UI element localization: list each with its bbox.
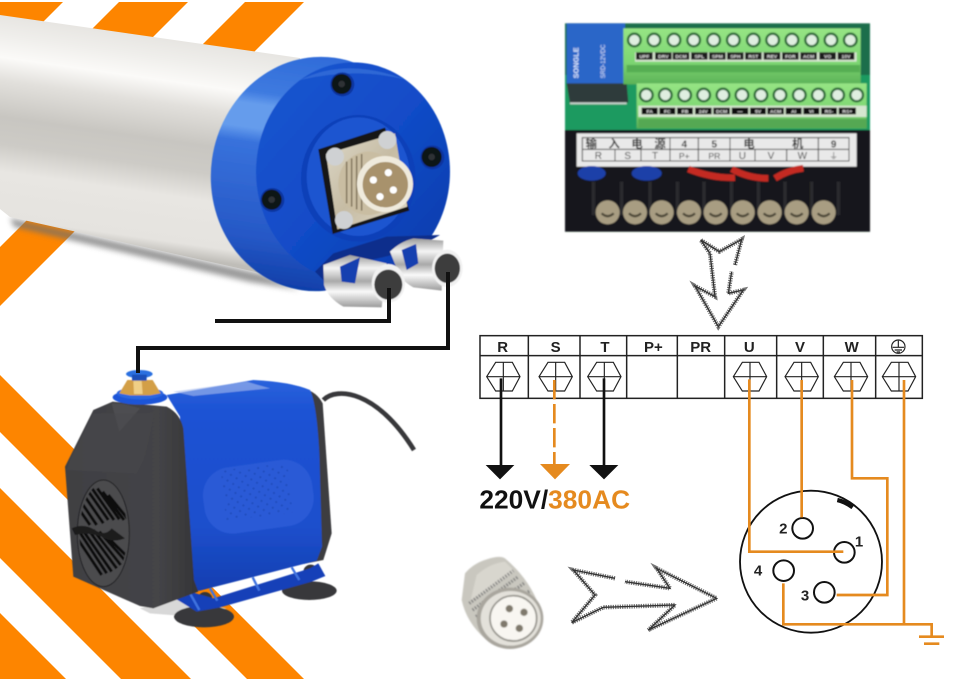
pin numbers: 1 — [855, 534, 863, 551]
relay text: SONGLE — [571, 47, 580, 78]
pump cable — [323, 394, 414, 450]
upper terminal labels: VO — [824, 54, 831, 60]
relay: SRD-12VDC — [601, 44, 607, 78]
rear gland — [390, 238, 463, 291]
connector pins — [370, 169, 397, 200]
label strip text: 9 — [831, 140, 837, 151]
sketch arrow right — [572, 568, 717, 630]
black terminal section — [565, 130, 870, 232]
terminal labels: U — [744, 339, 755, 356]
upper terminal labels: FOR — [785, 54, 796, 60]
upper terminal labels: UPF — [639, 54, 649, 60]
upper terminal labels: 10V — [842, 54, 851, 60]
wiring diagram — [479, 336, 944, 644]
sketch arrow down — [695, 239, 743, 327]
terminal label strip — [577, 133, 857, 167]
pin numbers: 3 — [801, 588, 809, 605]
voltage label: 220V/380AC — [479, 484, 630, 514]
pump dark rear strip — [303, 388, 332, 564]
terminal labels: V — [795, 339, 805, 356]
label strip text: 4 — [682, 140, 688, 151]
label strip text: U — [739, 151, 746, 162]
connector outline — [740, 491, 882, 633]
pin numbers: 4 — [754, 563, 763, 580]
background stripes — [0, 2, 304, 679]
terminal labels: P+ — [644, 339, 663, 356]
pin numbers — [754, 520, 863, 605]
label strip text: P+ — [679, 151, 690, 161]
terminal labels: T — [600, 339, 610, 356]
label strip text: R — [595, 151, 602, 162]
label strip text: 输入电源 — [586, 137, 666, 151]
terminal table — [480, 336, 922, 398]
lower terminal block — [637, 83, 867, 128]
lower terminal labels: ACM — [770, 109, 781, 115]
front gland — [323, 255, 405, 307]
upper terminal labels — [639, 54, 851, 60]
label strip text: PR — [708, 151, 720, 161]
lower terminal labels: DCM — [716, 109, 727, 115]
plug face — [490, 596, 537, 641]
pump top highlight — [173, 382, 270, 396]
terminal labels: R — [497, 339, 508, 356]
ground label symbol — [892, 340, 905, 353]
plug rim — [477, 588, 543, 649]
plate screws — [326, 131, 396, 229]
spindle head — [196, 43, 463, 307]
lower terminal labels: 24V — [699, 109, 708, 115]
label strip text: V — [768, 151, 775, 162]
plug body — [462, 557, 537, 640]
label strip text: W — [798, 151, 808, 162]
spindle shadow — [10, 218, 300, 290]
water hoses to spindle — [138, 272, 448, 374]
label strip text: ⏚ — [829, 151, 838, 161]
terminal labels: W — [845, 339, 860, 356]
terminal screws — [592, 182, 840, 224]
threaded collar — [338, 152, 398, 215]
upper terminal labels: SPL — [694, 54, 704, 60]
pump feet rail — [173, 563, 325, 612]
pump base shadow — [140, 598, 227, 616]
lower terminal labels: RS+ — [842, 109, 852, 115]
brass fitting — [113, 370, 167, 405]
hose into pump — [136, 346, 140, 373]
power input arrows — [486, 378, 618, 479]
green pcb — [565, 75, 870, 132]
pump side panel — [199, 456, 317, 537]
upper terminal labels: RST — [748, 54, 758, 60]
lower terminal labels: — — [738, 109, 743, 115]
terminal labels — [497, 339, 860, 356]
label strip text: 5 — [712, 140, 718, 151]
spindle cylinder — [0, 15, 300, 288]
pump black housing — [65, 402, 198, 608]
connector key — [837, 500, 853, 507]
connector plate — [326, 133, 407, 229]
connector base — [318, 128, 409, 234]
blue rear ring — [196, 43, 441, 305]
label strip text — [586, 137, 838, 162]
spindle motor photo — [0, 15, 463, 307]
suction cups — [174, 565, 337, 627]
water pump photo — [65, 370, 414, 627]
female aviation plug photo — [462, 557, 543, 649]
terminal labels: S — [551, 339, 561, 356]
label strip text: T — [652, 151, 658, 162]
lower terminal labels — [646, 109, 852, 115]
lower terminal labels: AI — [791, 109, 797, 115]
upper terminal block — [623, 28, 861, 84]
pump blue housing — [167, 380, 322, 591]
face bolts — [260, 72, 444, 212]
upper terminal labels: SPH — [730, 54, 741, 60]
relay — [567, 23, 628, 104]
pump dot pattern — [221, 463, 292, 520]
raised boss — [301, 115, 416, 242]
label strip text: S — [624, 151, 631, 162]
lower terminal labels: RS- — [825, 109, 834, 115]
upper terminal labels: SPM — [712, 54, 723, 60]
lower terminal labels: FB — [682, 109, 689, 115]
upper terminal labels: DCM — [675, 54, 687, 60]
lower terminal labels: VI — [809, 109, 814, 115]
pin numbers: 2 — [779, 520, 788, 537]
orange motor wires — [749, 379, 944, 644]
board background — [565, 23, 870, 232]
connector socket — [357, 156, 413, 212]
lower terminal labels: FC — [664, 109, 671, 115]
face top highlight — [300, 68, 407, 80]
blue front face — [256, 62, 450, 281]
connector pins — [773, 518, 855, 603]
VFD terminal board photo — [565, 23, 870, 232]
label strip text: 电机 — [743, 137, 804, 151]
gland base — [315, 235, 440, 283]
fan grille — [72, 480, 129, 587]
upper terminal labels: REV — [767, 54, 778, 60]
lower terminal labels: 5V — [755, 109, 762, 115]
terminal labels: PR — [690, 339, 711, 356]
colored wires — [578, 166, 803, 181]
plug sockets — [500, 605, 528, 632]
screw hexagons — [487, 362, 916, 391]
upper terminal labels: ACM — [803, 54, 814, 60]
housing facet — [112, 403, 140, 432]
lower terminal labels: FA — [646, 109, 653, 115]
upper terminal labels: DRV — [658, 54, 669, 60]
